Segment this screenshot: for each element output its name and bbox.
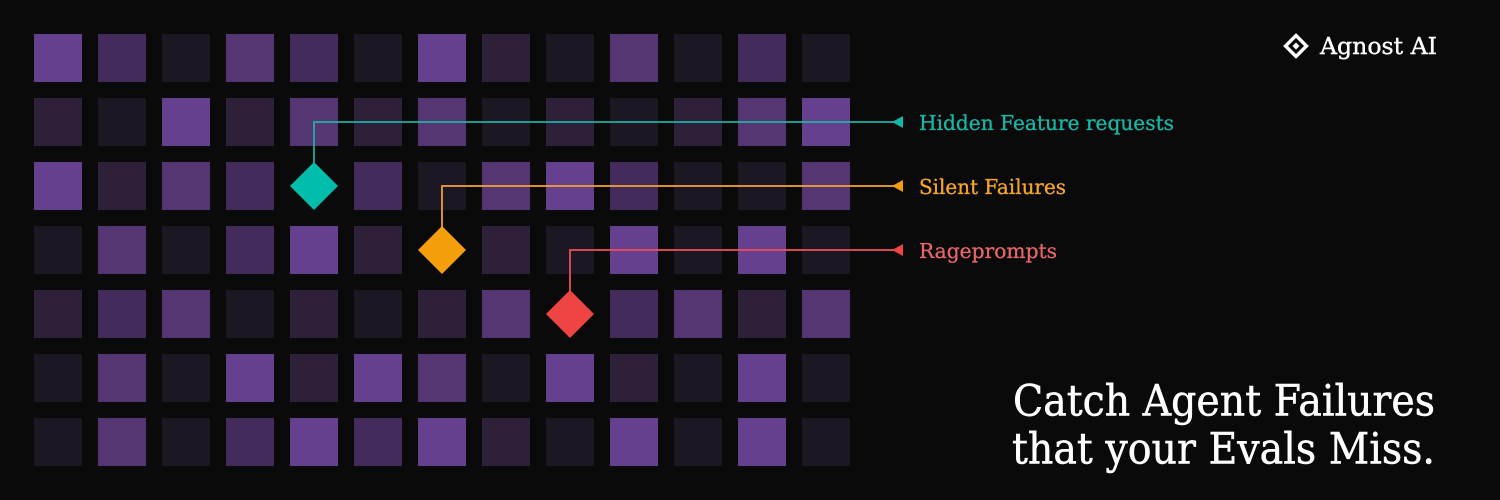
- callout: rageprompts: [546, 239, 1057, 338]
- purple tile grid: [34, 34, 850, 466]
- headline: that your Evals Miss.: [1012, 424, 1435, 474]
- icon: orange diamond: [418, 226, 466, 274]
- connector: red: [570, 250, 896, 292]
- arrow: red: [892, 244, 903, 256]
- label: hidden feature requests: Hidden Feature requests: [919, 111, 1174, 135]
- icon: teal diamond: [290, 162, 338, 210]
- wordmark: Agnost AI: [1319, 32, 1437, 60]
- connector: orange: [442, 186, 896, 228]
- label: rageprompts: Rageprompts: [919, 239, 1057, 263]
- headline: [1012, 376, 1435, 474]
- callout: silent failures: [418, 175, 1066, 274]
- headline: Catch Agent Failures: [1013, 376, 1435, 426]
- connector: teal: [314, 122, 896, 164]
- logo: [1286, 32, 1437, 60]
- arrow: orange: [892, 180, 903, 192]
- label: silent failures: Silent Failures: [919, 175, 1066, 199]
- callout: hidden feature requests: [290, 111, 1174, 210]
- icon: red diamond: [546, 290, 594, 338]
- arrow: teal: [892, 116, 903, 128]
- icon: agnost diamond: [1286, 36, 1306, 56]
